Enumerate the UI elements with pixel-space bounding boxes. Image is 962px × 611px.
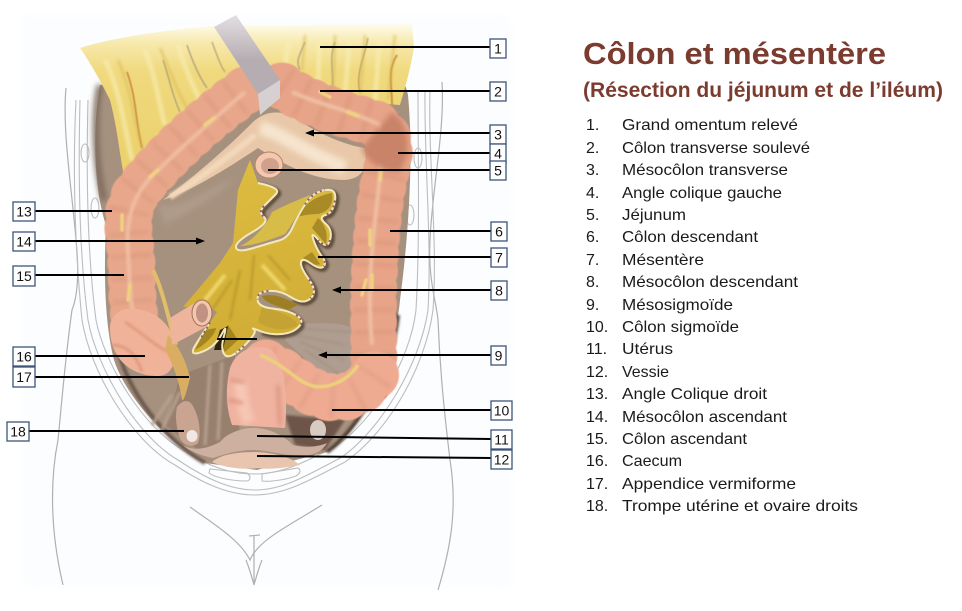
box 13: 13 bbox=[16, 204, 32, 220]
legend list: Angle colique gauche bbox=[622, 185, 782, 202]
arrow heads bbox=[196, 130, 341, 358]
legend list: 12. bbox=[586, 364, 608, 381]
box 17 bbox=[13, 367, 35, 387]
body outline bbox=[53, 82, 453, 590]
box 14 bbox=[13, 232, 35, 251]
box 15 bbox=[13, 266, 35, 286]
box 12 bbox=[491, 450, 512, 469]
box 4: 4 bbox=[494, 146, 502, 162]
box 7 bbox=[491, 248, 507, 267]
number boxes bbox=[7, 39, 512, 469]
mesentery shadow bbox=[260, 185, 337, 336]
panel: appendice vermiforme bbox=[153, 270, 190, 400]
box 5: 5 bbox=[494, 162, 502, 178]
box 10 bbox=[491, 401, 512, 420]
panel: côlon transverse et ascendant bbox=[122, 90, 246, 350]
panel: mésosigmoïde bbox=[285, 323, 355, 385]
legend list: 2. bbox=[586, 140, 599, 157]
box 9: 9 bbox=[495, 348, 503, 364]
legend list: 13. bbox=[586, 386, 608, 403]
retractor band bbox=[214, 15, 280, 115]
legend list: Vessie bbox=[622, 364, 669, 381]
panel: mésocôlon transverse bbox=[163, 112, 366, 200]
pelvic folds bbox=[152, 355, 345, 455]
legend list: Mésocôlon descendant bbox=[622, 274, 799, 291]
legend list: Grand omentum relevé bbox=[622, 117, 798, 134]
box 4 bbox=[490, 144, 506, 163]
box 18 bbox=[7, 422, 29, 441]
legend list: 8. bbox=[586, 274, 599, 291]
box 18: 18 bbox=[10, 424, 26, 440]
legend list: Mésocôlon transverse bbox=[622, 162, 788, 179]
abdominal wall rings bbox=[74, 90, 434, 495]
box 1 bbox=[490, 39, 506, 58]
legend list: 16. bbox=[586, 453, 608, 470]
box 7: 7 bbox=[495, 250, 503, 266]
legend list: Jéjunum bbox=[622, 207, 686, 224]
mesentery rim bbox=[193, 183, 335, 356]
panel: vessie bbox=[212, 452, 300, 469]
legend list: Mésentère bbox=[622, 252, 704, 269]
box 1: 1 bbox=[494, 40, 502, 56]
legend list: 9. bbox=[586, 297, 599, 314]
box 15: 15 bbox=[16, 268, 32, 284]
legend list: Côlon ascendant bbox=[622, 431, 748, 448]
mesentery folds bbox=[195, 193, 332, 352]
legend list: Côlon transverse soulevé bbox=[622, 140, 810, 157]
box 10: 10 bbox=[494, 402, 509, 418]
box 16: 16 bbox=[16, 348, 32, 364]
legend list: 18. bbox=[586, 498, 608, 515]
legend list: 15. bbox=[586, 431, 608, 448]
panel: grand omentum bbox=[80, 24, 414, 180]
icon: section du jéjunum bbox=[255, 152, 283, 178]
abdominal cavity bbox=[95, 75, 410, 470]
panel: côlon sigmoïde bbox=[227, 347, 375, 428]
legend list: 7. bbox=[586, 252, 599, 269]
box 8: 8 bbox=[495, 282, 503, 298]
legend list: Utérus bbox=[622, 341, 673, 358]
legend list bbox=[586, 117, 858, 515]
box 11: 11 bbox=[494, 432, 509, 448]
box 8 bbox=[491, 281, 507, 300]
box 9 bbox=[491, 346, 506, 365]
legend list: Caecum bbox=[622, 453, 682, 470]
legend list: Angle Colique droit bbox=[622, 386, 768, 403]
box 3 bbox=[490, 125, 506, 144]
legend list: Côlon descendant bbox=[622, 229, 759, 246]
legend list: 6. bbox=[586, 229, 599, 246]
subtitle: (Résection du jéjunum et de l’iléum) bbox=[583, 79, 943, 102]
panel: caecum bbox=[110, 309, 175, 376]
box 16 bbox=[13, 347, 35, 366]
box 6: 6 bbox=[495, 224, 503, 240]
legend list: 4. bbox=[586, 185, 599, 202]
box 5 bbox=[490, 161, 506, 180]
image background bbox=[22, 16, 512, 586]
icon: section de l'iléon bbox=[170, 300, 212, 345]
box 13 bbox=[13, 202, 35, 221]
legend list: 14. bbox=[586, 409, 608, 426]
legend list: Trompe utérine et ovaire droits bbox=[622, 498, 858, 515]
anatomical illustration bbox=[22, 16, 512, 590]
title: Côlon et mésentère bbox=[583, 36, 886, 71]
box 3: 3 bbox=[494, 126, 502, 142]
legend list: 10. bbox=[586, 319, 608, 336]
box 2: 2 bbox=[494, 84, 502, 100]
panel: mésocôlon ascendant fold bbox=[158, 178, 235, 225]
box 17: 17 bbox=[16, 369, 32, 385]
legend list: Mésosigmoïde bbox=[622, 297, 733, 314]
legend list: 17. bbox=[586, 476, 608, 493]
legend list: 11. bbox=[586, 341, 607, 358]
panel: utérus bbox=[183, 428, 327, 458]
box 12: 12 bbox=[494, 452, 509, 468]
box 11 bbox=[491, 430, 512, 449]
panel: mésentère bbox=[183, 160, 335, 356]
legend list: Mésocôlon ascendant bbox=[622, 409, 788, 426]
legend list: 1. bbox=[586, 117, 599, 134]
panel: ovaire gauche bbox=[310, 420, 326, 440]
box 2 bbox=[490, 82, 506, 101]
legend list: Côlon sigmoïde bbox=[622, 319, 739, 336]
legend list: 5. bbox=[586, 207, 599, 224]
legend list: 3. bbox=[586, 162, 599, 179]
box 6 bbox=[491, 222, 507, 241]
panel: côlon transverse droit, angle gauche et descendant bbox=[282, 86, 408, 385]
box 14: 14 bbox=[16, 234, 32, 250]
leader lines bbox=[29, 47, 491, 458]
legend list: Appendice vermiforme bbox=[622, 476, 796, 493]
panel: ovaire droit bbox=[176, 401, 200, 446]
